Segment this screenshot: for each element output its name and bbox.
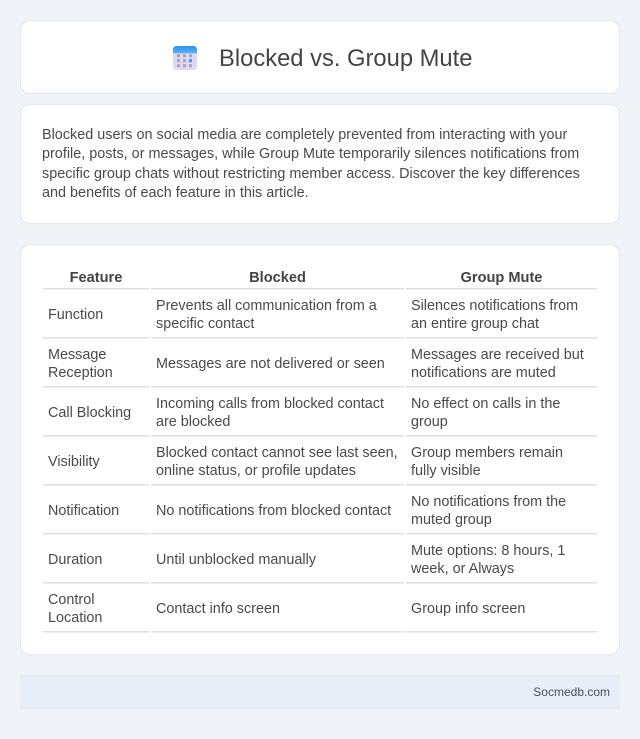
intro text: and benefits of each feature in this article. (42, 185, 309, 201)
intro card (20, 104, 620, 224)
intro text: profile, posts, or messages, while Group Mute temporarily silences notifications from (42, 146, 579, 162)
table: Blocked (249, 270, 306, 286)
row: function: Function (48, 307, 103, 323)
table: No notifications from blocked contact (156, 503, 391, 519)
row: message reception (48, 347, 113, 381)
table: Messages are received but (411, 347, 584, 363)
row: message reception: Reception (48, 365, 113, 381)
table: Group members remain (411, 445, 563, 461)
table: Silences notifications from (411, 298, 578, 314)
row: message reception: Message (48, 347, 106, 363)
intro text (42, 127, 580, 201)
table: Messages are not delivered or seen (156, 356, 385, 372)
table: Mute options: 8 hours, 1 (411, 543, 565, 559)
row: control location: Control (48, 592, 94, 608)
table: Until unblocked manually (156, 552, 316, 568)
table: notifications are muted (411, 365, 556, 381)
table: muted group (411, 512, 492, 528)
row: visibility: Visibility (48, 454, 100, 470)
intro text: specific group chats without restricting member access. Discover the key differences (42, 166, 580, 182)
icon: calendar (173, 46, 197, 70)
table: group (411, 414, 448, 430)
table card (20, 244, 620, 655)
row: notification: Notification (48, 503, 119, 519)
table: week, or Always (411, 561, 514, 577)
table: specific contact (156, 316, 254, 332)
row: control location: Location (48, 610, 102, 626)
table: Group info screen (411, 601, 525, 617)
title: Blocked vs. Group Mute (219, 45, 472, 72)
table: online status, or profile updates (156, 463, 356, 479)
table: an entire group chat (411, 316, 539, 332)
table: No notifications from the (411, 494, 566, 510)
table header: Feature (70, 270, 122, 286)
table: are blocked (156, 414, 230, 430)
footer text: Socmedb.com (533, 685, 610, 699)
row: duration: Duration (48, 552, 102, 568)
table: Blocked contact cannot see last seen, (156, 445, 398, 461)
table: Incoming calls from blocked contact (156, 396, 384, 412)
table: No effect on calls in the (411, 396, 560, 412)
table: Group Mute (461, 270, 542, 286)
row: control location (48, 592, 102, 626)
table: Prevents all communication from a (156, 298, 377, 314)
row: call blocking: Call Blocking (48, 405, 131, 421)
footer bar (20, 675, 620, 709)
title card (20, 20, 620, 94)
intro text: Blocked users on social media are completely prevented from interacting with your (42, 127, 567, 143)
table: Contact info screen (156, 601, 280, 617)
table: fully visible (411, 463, 481, 479)
